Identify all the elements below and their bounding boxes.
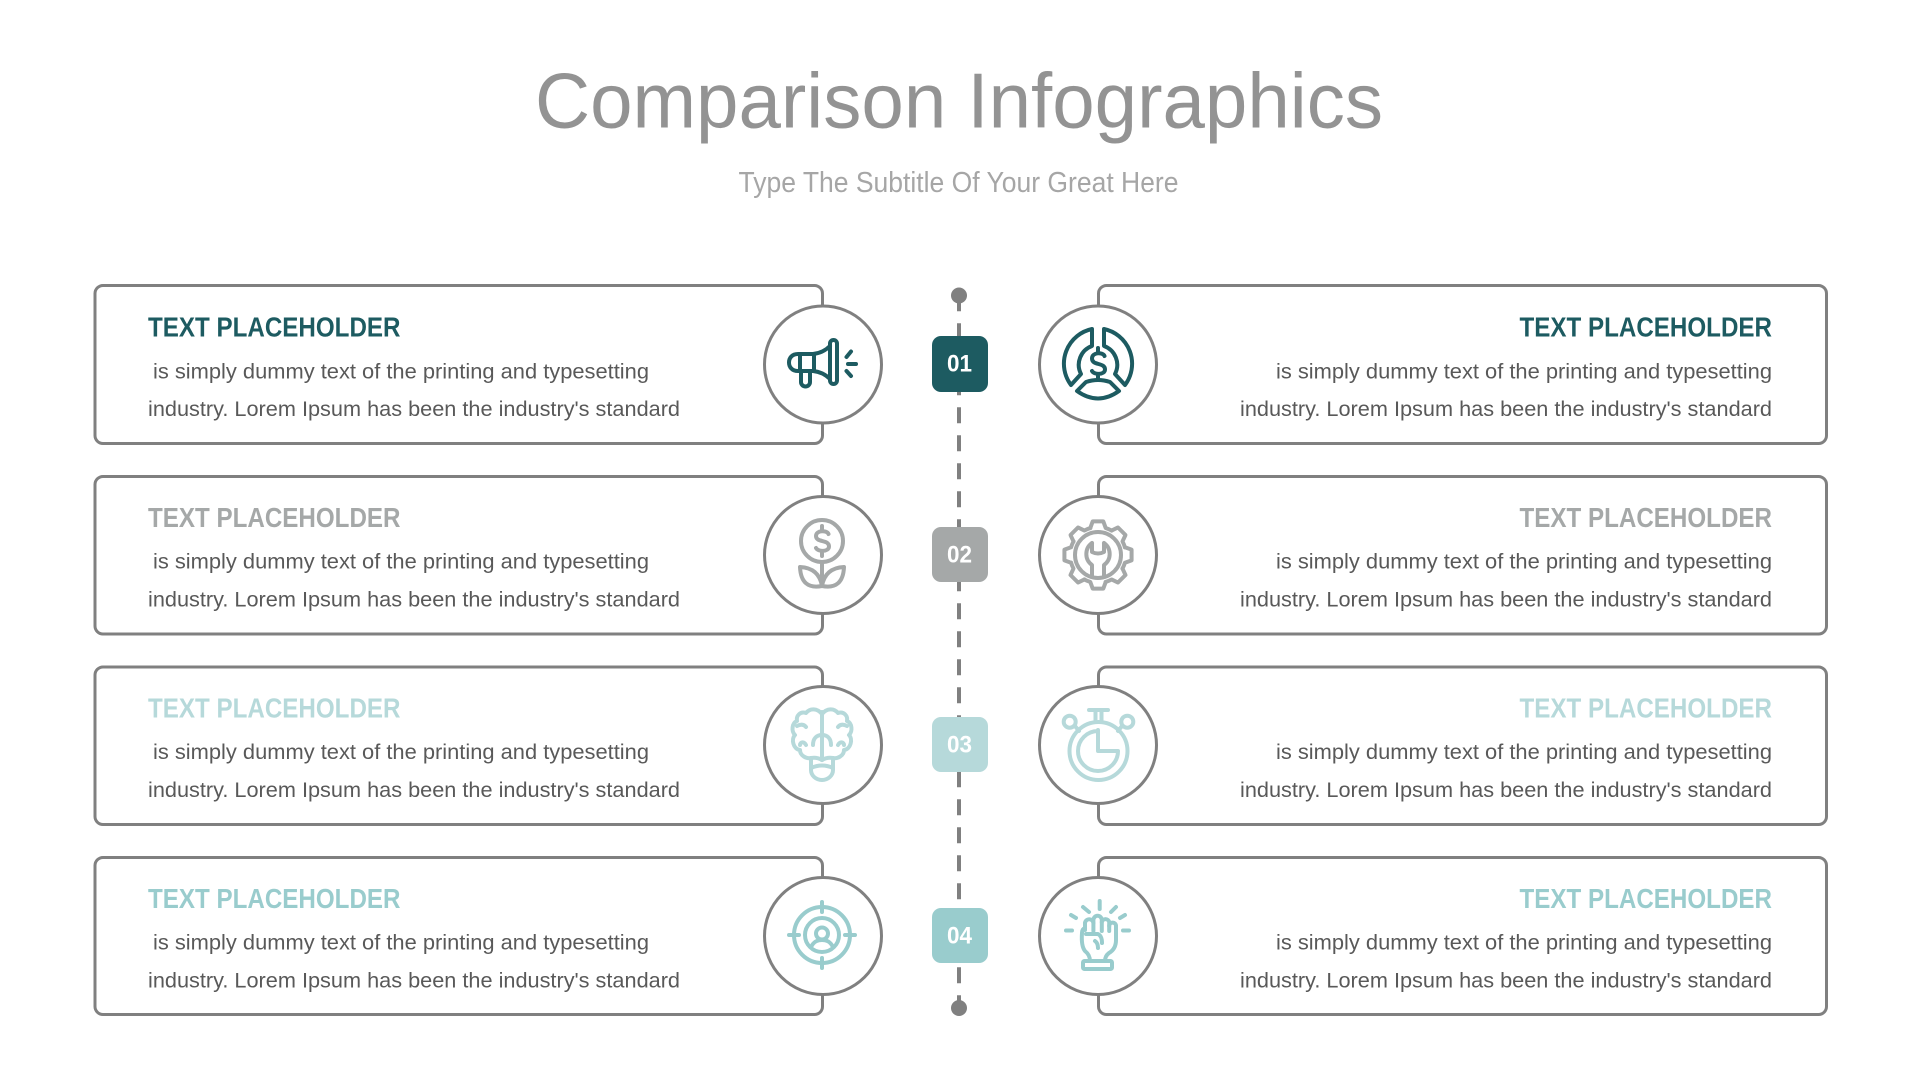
body text: industry. Lorem Ipsum has been the industry's standard	[1240, 970, 1772, 992]
heading: TEXT PLACEHOLDER	[148, 312, 400, 343]
body text	[148, 932, 680, 992]
subtitle: Type The Subtitle Of Your Great Here	[738, 167, 1178, 199]
body text	[1240, 741, 1772, 802]
panel: left row 4	[95, 858, 882, 1014]
card outline	[95, 858, 822, 1014]
body text: industry. Lorem Ipsum has been the industry's standard	[148, 588, 680, 612]
icon: gear with wrench	[1064, 521, 1132, 589]
icon: money plant	[800, 520, 844, 587]
body text: industry. Lorem Ipsum has been the industry's standard	[1240, 398, 1772, 421]
panel: right row 1	[1040, 286, 1826, 444]
card outline	[1098, 858, 1826, 1014]
badge 01	[932, 336, 988, 392]
badge 02: 02	[947, 542, 972, 569]
body text: industry. Lorem Ipsum has been the industry's standard	[148, 779, 680, 802]
card outline	[95, 667, 822, 824]
icon: raised fist	[1066, 901, 1129, 969]
heading: TEXT PLACEHOLDER	[148, 693, 400, 724]
icon circle	[764, 306, 882, 423]
badge 02	[932, 527, 988, 582]
panel: left row 3	[95, 667, 882, 824]
badge 01: 01	[947, 351, 972, 378]
icon: target person	[789, 902, 855, 968]
icon circle	[1040, 306, 1156, 423]
body text	[148, 741, 680, 802]
badge 04: 04	[947, 923, 973, 950]
title: Comparison Infographics	[535, 56, 1383, 144]
icon circle	[764, 878, 882, 994]
card outline	[95, 476, 822, 634]
icon: stopwatch	[1064, 710, 1133, 780]
card outline	[1098, 286, 1826, 444]
card outline	[95, 286, 822, 444]
body text: is simply dummy text of the printing and typesetting	[1276, 551, 1772, 574]
card outline	[1098, 476, 1826, 634]
body text	[1240, 551, 1772, 612]
icon circle	[764, 686, 882, 804]
heading: TEXT PLACEHOLDER	[1520, 883, 1772, 914]
body text: is simply dummy text of the printing and typesetting	[153, 741, 649, 764]
heading: TEXT PLACEHOLDER	[1520, 502, 1772, 533]
badge 03	[932, 717, 988, 772]
body text: is simply dummy text of the printing and typesetting	[153, 360, 649, 383]
panel: left row 2	[95, 476, 882, 634]
heading: TEXT PLACEHOLDER	[148, 502, 400, 533]
icon: megaphone	[789, 340, 856, 386]
icon: brain bulb	[793, 709, 851, 780]
icon circle	[1040, 496, 1156, 614]
panel: right row 3	[1040, 667, 1826, 824]
body text	[148, 551, 680, 612]
icon circle	[1040, 878, 1156, 994]
heading: TEXT PLACEHOLDER	[1520, 312, 1772, 343]
body text	[148, 360, 680, 421]
icon circle	[764, 496, 882, 614]
panel: right row 2	[1040, 476, 1826, 634]
body text: industry. Lorem Ipsum has been the industry's standard	[1240, 779, 1772, 802]
body text	[1240, 932, 1772, 992]
icon: dollar pie chart	[1064, 329, 1132, 398]
timeline start dot	[951, 288, 967, 304]
badge 04	[932, 908, 988, 963]
timeline end dot	[951, 1000, 967, 1016]
badge 03: 03	[947, 732, 972, 759]
body text: industry. Lorem Ipsum has been the industry's standard	[1240, 588, 1772, 612]
heading: TEXT PLACEHOLDER	[148, 883, 400, 914]
card outline	[1098, 667, 1826, 824]
body text: industry. Lorem Ipsum has been the industry's standard	[148, 970, 680, 992]
body text: industry. Lorem Ipsum has been the industry's standard	[148, 398, 680, 421]
heading: TEXT PLACEHOLDER	[1520, 693, 1772, 724]
body text: is simply dummy text of the printing and typesetting	[1276, 360, 1772, 383]
body text	[1240, 360, 1772, 421]
panel: right row 4	[1040, 858, 1826, 1014]
body text: is simply dummy text of the printing and typesetting	[153, 932, 649, 954]
body text: is simply dummy text of the printing and typesetting	[153, 551, 649, 574]
icon circle	[1040, 686, 1156, 804]
panel: left row 1	[95, 286, 882, 444]
body text: is simply dummy text of the printing and typesetting	[1276, 932, 1772, 954]
body text: is simply dummy text of the printing and typesetting	[1276, 741, 1772, 764]
timeline dashed line	[957, 295, 961, 1008]
